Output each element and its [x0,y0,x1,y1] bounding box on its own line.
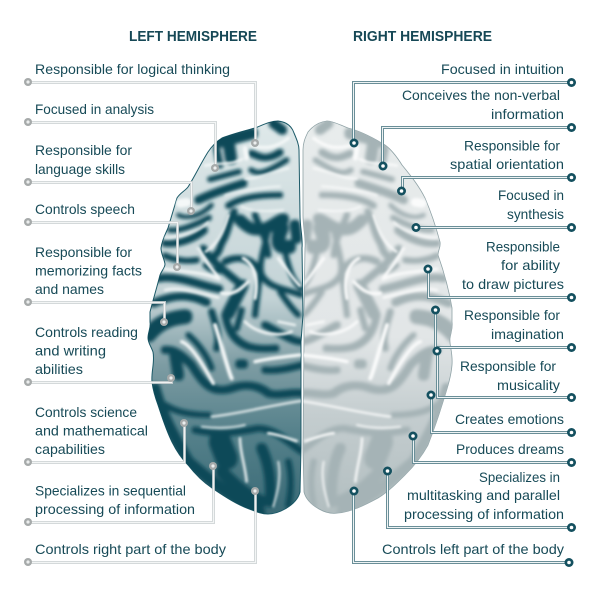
brain: left hemisphere [148,121,303,514]
callout: science and maths: capabilities [35,441,105,457]
callout: sequential processing [24,462,217,526]
callout: memorizing facts: Responsible for [35,244,132,260]
callout: spatial orientation: spatial orientation [450,156,564,172]
callout: dreams [408,432,576,467]
callout: analysis: Focused in analysis [35,101,154,117]
callout: science and maths: and mathematical [35,422,148,438]
callout: musicality [432,346,576,402]
callout: draw pictures: Responsible [486,238,560,254]
callout: non-verbal information [378,87,576,170]
callout: imagination: Responsible for [464,307,560,323]
callout: memorizing facts: and names [35,281,104,297]
callout: right part of body: Controls right part of the body [35,541,226,557]
callout: spatial orientation: Responsible for [464,138,560,154]
title: right hemisphere heading: RIGHT HEMISPHERE [353,29,492,45]
callout: imagination [431,306,576,352]
callout: logical thinking: Responsible for logical thinking [35,61,230,77]
callout: musicality: Responsible for [460,358,556,374]
callout: synthesis: Focused in [498,187,564,203]
callout: logical thinking [24,61,259,147]
title: left hemisphere heading: LEFT HEMISPHERE [129,29,257,45]
callout: multitasking: processing of information [404,506,564,522]
callout: left part of body: Controls left part of the body [382,541,564,557]
callout: reading and writing: and writing [35,342,106,358]
callout: multitasking: multitasking and parallel [407,487,560,503]
callout: sequential processing: processing of information [35,501,195,517]
callout: multitasking [383,466,576,532]
callout: non-verbal information: Conceives the non-verbal [402,87,560,103]
callout: reading and writing: abilities [35,361,83,377]
callout: language skills: language skills [35,161,125,177]
callout: draw pictures: for ability [501,257,560,273]
callout: speech [24,201,181,271]
callout: draw pictures: to draw pictures [462,276,564,292]
brain: right hemisphere [300,121,454,513]
callout: intuition [350,61,576,148]
callout: memorizing facts [24,244,168,326]
callout: imagination: imagination [491,326,564,342]
callout: multitasking: Specializes in [479,469,560,485]
callout: language skills [24,142,195,215]
callout: right part of body [24,487,259,566]
callout: science and maths: Controls science [35,404,137,420]
callout: emotions [426,390,576,437]
callout: intuition: Focused in intuition [441,61,564,77]
callout: emotions: Creates emotions [455,411,564,427]
callout: analysis [24,101,219,172]
callout: synthesis [412,187,576,232]
callout: science and maths [24,404,188,466]
callout: language skills: Responsible for [35,142,132,158]
callout: sequential processing: Specializes in sequential [35,482,186,498]
callout: reading and writing: Controls reading [35,324,138,340]
callout: reading and writing [24,324,175,386]
callout: draw pictures [424,238,576,302]
callout: non-verbal information: information [491,106,564,122]
callout: dreams: Produces dreams [456,441,564,457]
callout: synthesis: synthesis [507,206,564,222]
callout: memorizing facts: memorizing facts [35,262,142,278]
callout: spatial orientation [397,138,576,196]
callout: left part of body [350,486,574,567]
callout: musicality: musicality [497,377,560,393]
callout: speech: Controls speech [35,201,135,217]
